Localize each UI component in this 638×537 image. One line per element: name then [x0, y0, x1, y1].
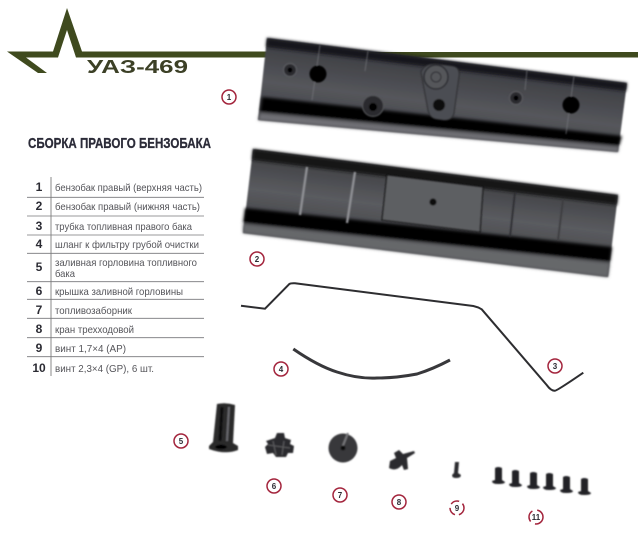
badge 11: 11	[532, 513, 541, 522]
parts table: шланг к фильтру грубой очистки	[55, 239, 199, 251]
header line running behind the tank	[262, 52, 638, 58]
badge 1	[222, 90, 236, 104]
part 9: screw	[452, 462, 461, 478]
parts table: бензобак правый (нижняя часть)	[55, 201, 200, 213]
parts table: винт 1,7×4 (АР)	[55, 343, 126, 355]
parts table: топливозаборник	[55, 305, 132, 317]
badge 6: 6	[272, 482, 277, 491]
star logo with header line	[7, 8, 272, 73]
parts table: трубка топливная правого бака	[55, 221, 192, 233]
badge 11	[529, 510, 543, 524]
parts table: 9	[36, 341, 43, 355]
part 3: fuel tube	[241, 283, 583, 391]
part 7: fuel pickup	[328, 433, 358, 462]
badge 5	[174, 434, 188, 448]
model title: УАЗ-469	[87, 57, 188, 77]
parts table: бака	[55, 268, 75, 280]
badge 4: 4	[279, 365, 284, 374]
parts table	[27, 177, 204, 376]
badge 2: 2	[255, 255, 260, 264]
parts table: 6	[36, 284, 43, 298]
part 10: six screws	[492, 467, 591, 495]
part 8: three-way valve	[389, 450, 415, 470]
badge 3	[548, 359, 562, 373]
badge 4	[274, 362, 288, 376]
parts table: 7	[36, 303, 43, 317]
parts table: 5	[36, 260, 43, 274]
heading: СБОРКА ПРАВОГО БЕНЗОБАКА	[28, 136, 211, 152]
parts table: винт 2,3×4 (GP), 6 шт.	[55, 363, 154, 375]
parts table: крышка заливной горловины	[55, 286, 183, 298]
upper tank: top rim and dark lower band	[258, 38, 627, 152]
badge 2	[250, 252, 264, 266]
parts table: заливная горловина топливного	[55, 257, 197, 269]
badge 8: 8	[397, 498, 402, 507]
parts table: 8	[36, 322, 43, 336]
badge 9	[450, 501, 464, 515]
parts table: 4	[36, 237, 43, 251]
badge 5: 5	[179, 437, 184, 446]
parts table: 10	[32, 361, 46, 375]
parts table: 3	[36, 219, 43, 233]
part 5: filler neck	[209, 403, 238, 452]
badge 8	[392, 495, 406, 509]
badge 7	[333, 488, 347, 502]
badge 1: 1	[227, 93, 232, 102]
parts table: кран трехходовой	[55, 324, 134, 336]
badge 6	[267, 479, 281, 493]
badge 3: 3	[553, 362, 558, 371]
part 1: upper tank half	[258, 38, 627, 152]
lower tank: top rim and dark lower band	[243, 149, 618, 277]
part 4: hose	[293, 349, 450, 378]
badge 7: 7	[338, 491, 343, 500]
part 2: lower tank half	[243, 149, 618, 277]
parts table: 1	[36, 180, 43, 194]
badge 9: 9	[455, 504, 460, 513]
parts table: бензобак правый (верхняя часть)	[55, 182, 202, 194]
part 6: filler cap	[265, 433, 294, 457]
parts table: 2	[36, 199, 43, 213]
